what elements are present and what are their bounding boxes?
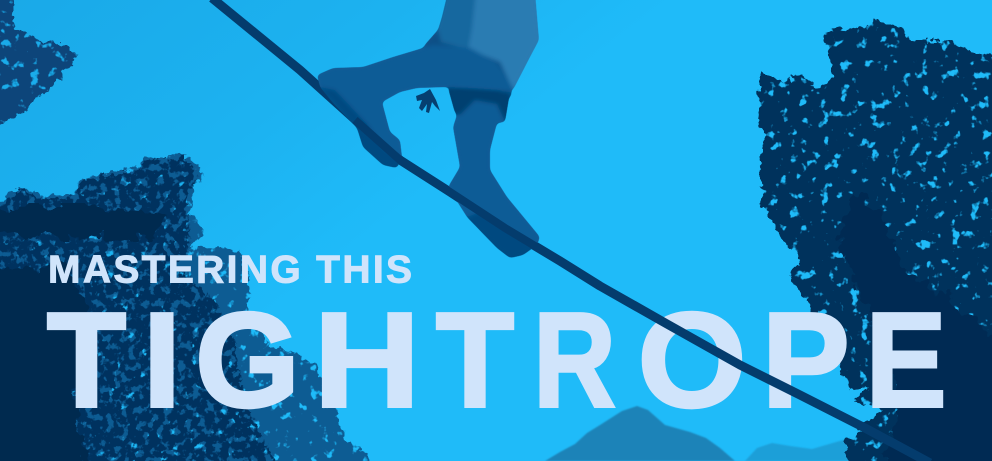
tree: lower left	[0, 155, 372, 461]
tree: top left	[0, 0, 76, 132]
mountains	[545, 406, 862, 461]
knee shadow	[448, 88, 510, 122]
tree: right	[758, 20, 992, 461]
heading: TIGHTROPE: E	[866, 284, 947, 436]
heading: TIGHTROPE: R	[533, 284, 616, 436]
sole shadow: front foot	[467, 212, 537, 258]
front leg and foot	[448, 88, 540, 258]
heading: TIGHTROPE: P	[762, 284, 850, 436]
sole shadow: rear foot	[320, 87, 402, 168]
tightrope	[212, 0, 930, 461]
heading: TIGHTROPE: H	[314, 284, 420, 436]
dark core of the tree	[0, 205, 170, 240]
rear leg and foot	[317, 45, 512, 168]
heading: TIGHTROPE: T	[47, 284, 126, 436]
hand	[416, 89, 440, 113]
rope over the feet	[355, 120, 545, 252]
subheading: MASTERING THIS	[48, 248, 412, 292]
shorts shaded side	[423, 0, 476, 50]
heading: TIGHTROPE: T	[436, 284, 514, 436]
heading: TIGHTROPE: I	[143, 284, 181, 436]
shorts	[423, 0, 539, 90]
walker	[317, 0, 540, 258]
tree trunk shading	[840, 190, 992, 461]
shorts shadow	[423, 30, 513, 90]
heading: TIGHTROPE: O	[638, 284, 746, 436]
heading: TIGHTROPE: G	[195, 284, 300, 436]
heading: TIGHTROPE	[47, 284, 947, 436]
